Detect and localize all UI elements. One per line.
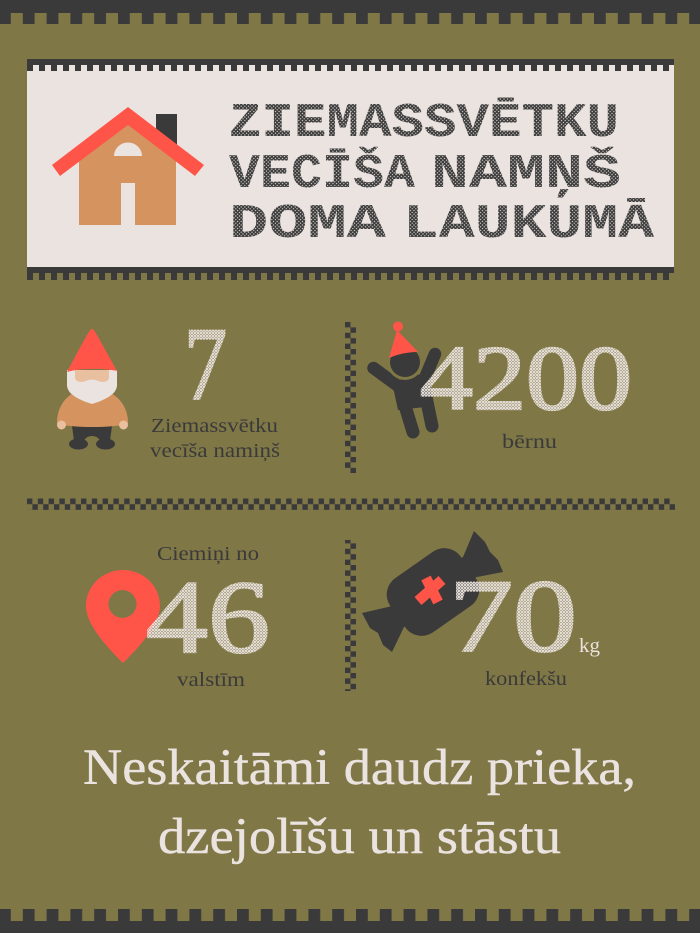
divider: upper vertical checker — [345, 322, 356, 473]
icon: child with hat — [374, 322, 435, 432]
icon: candy — [362, 531, 503, 652]
closing text: Neskaitāmi daudz prieka, — [83, 740, 636, 796]
icon: map pin — [86, 570, 160, 663]
top border — [0, 0, 700, 24]
label: countries: valstīm — [177, 669, 246, 691]
icon: house — [52, 107, 204, 225]
title: LAUKUMĀ — [403, 198, 654, 252]
bottom border — [0, 909, 700, 933]
closing text: dzejolīšu un stāstu — [158, 809, 561, 865]
title: DOMA — [229, 198, 386, 252]
stat: children — [374, 322, 632, 453]
label: children: bērnu — [502, 431, 557, 453]
divider: horizontal checker — [27, 498, 675, 510]
number: 4200: 4200 — [420, 327, 632, 429]
label: houses: Ziemassvētku — [151, 415, 278, 437]
title — [229, 97, 654, 252]
label: kg: kg — [579, 635, 600, 657]
number: 7: 7 — [184, 307, 227, 422]
label: guests from: Ciemiņi no — [157, 543, 259, 565]
stat: houses — [57, 307, 280, 462]
title: ZIEMASSVĒTKU — [229, 97, 619, 151]
number: 46: 46 — [146, 560, 270, 675]
title: VECĪŠA — [229, 146, 415, 202]
label: houses: vecīša namiņš — [150, 440, 280, 462]
panel: title banner — [27, 59, 674, 280]
stat: sweets — [362, 531, 600, 690]
label: sweets: konfekšu — [485, 668, 567, 690]
stat: countries — [86, 543, 270, 691]
divider: lower vertical checker — [345, 540, 356, 691]
title: NAMŅŠ — [431, 146, 621, 202]
closing text — [83, 740, 636, 865]
label: houses — [150, 415, 280, 462]
number: 70: 70 — [449, 559, 577, 674]
icon: gnome — [57, 329, 128, 450]
